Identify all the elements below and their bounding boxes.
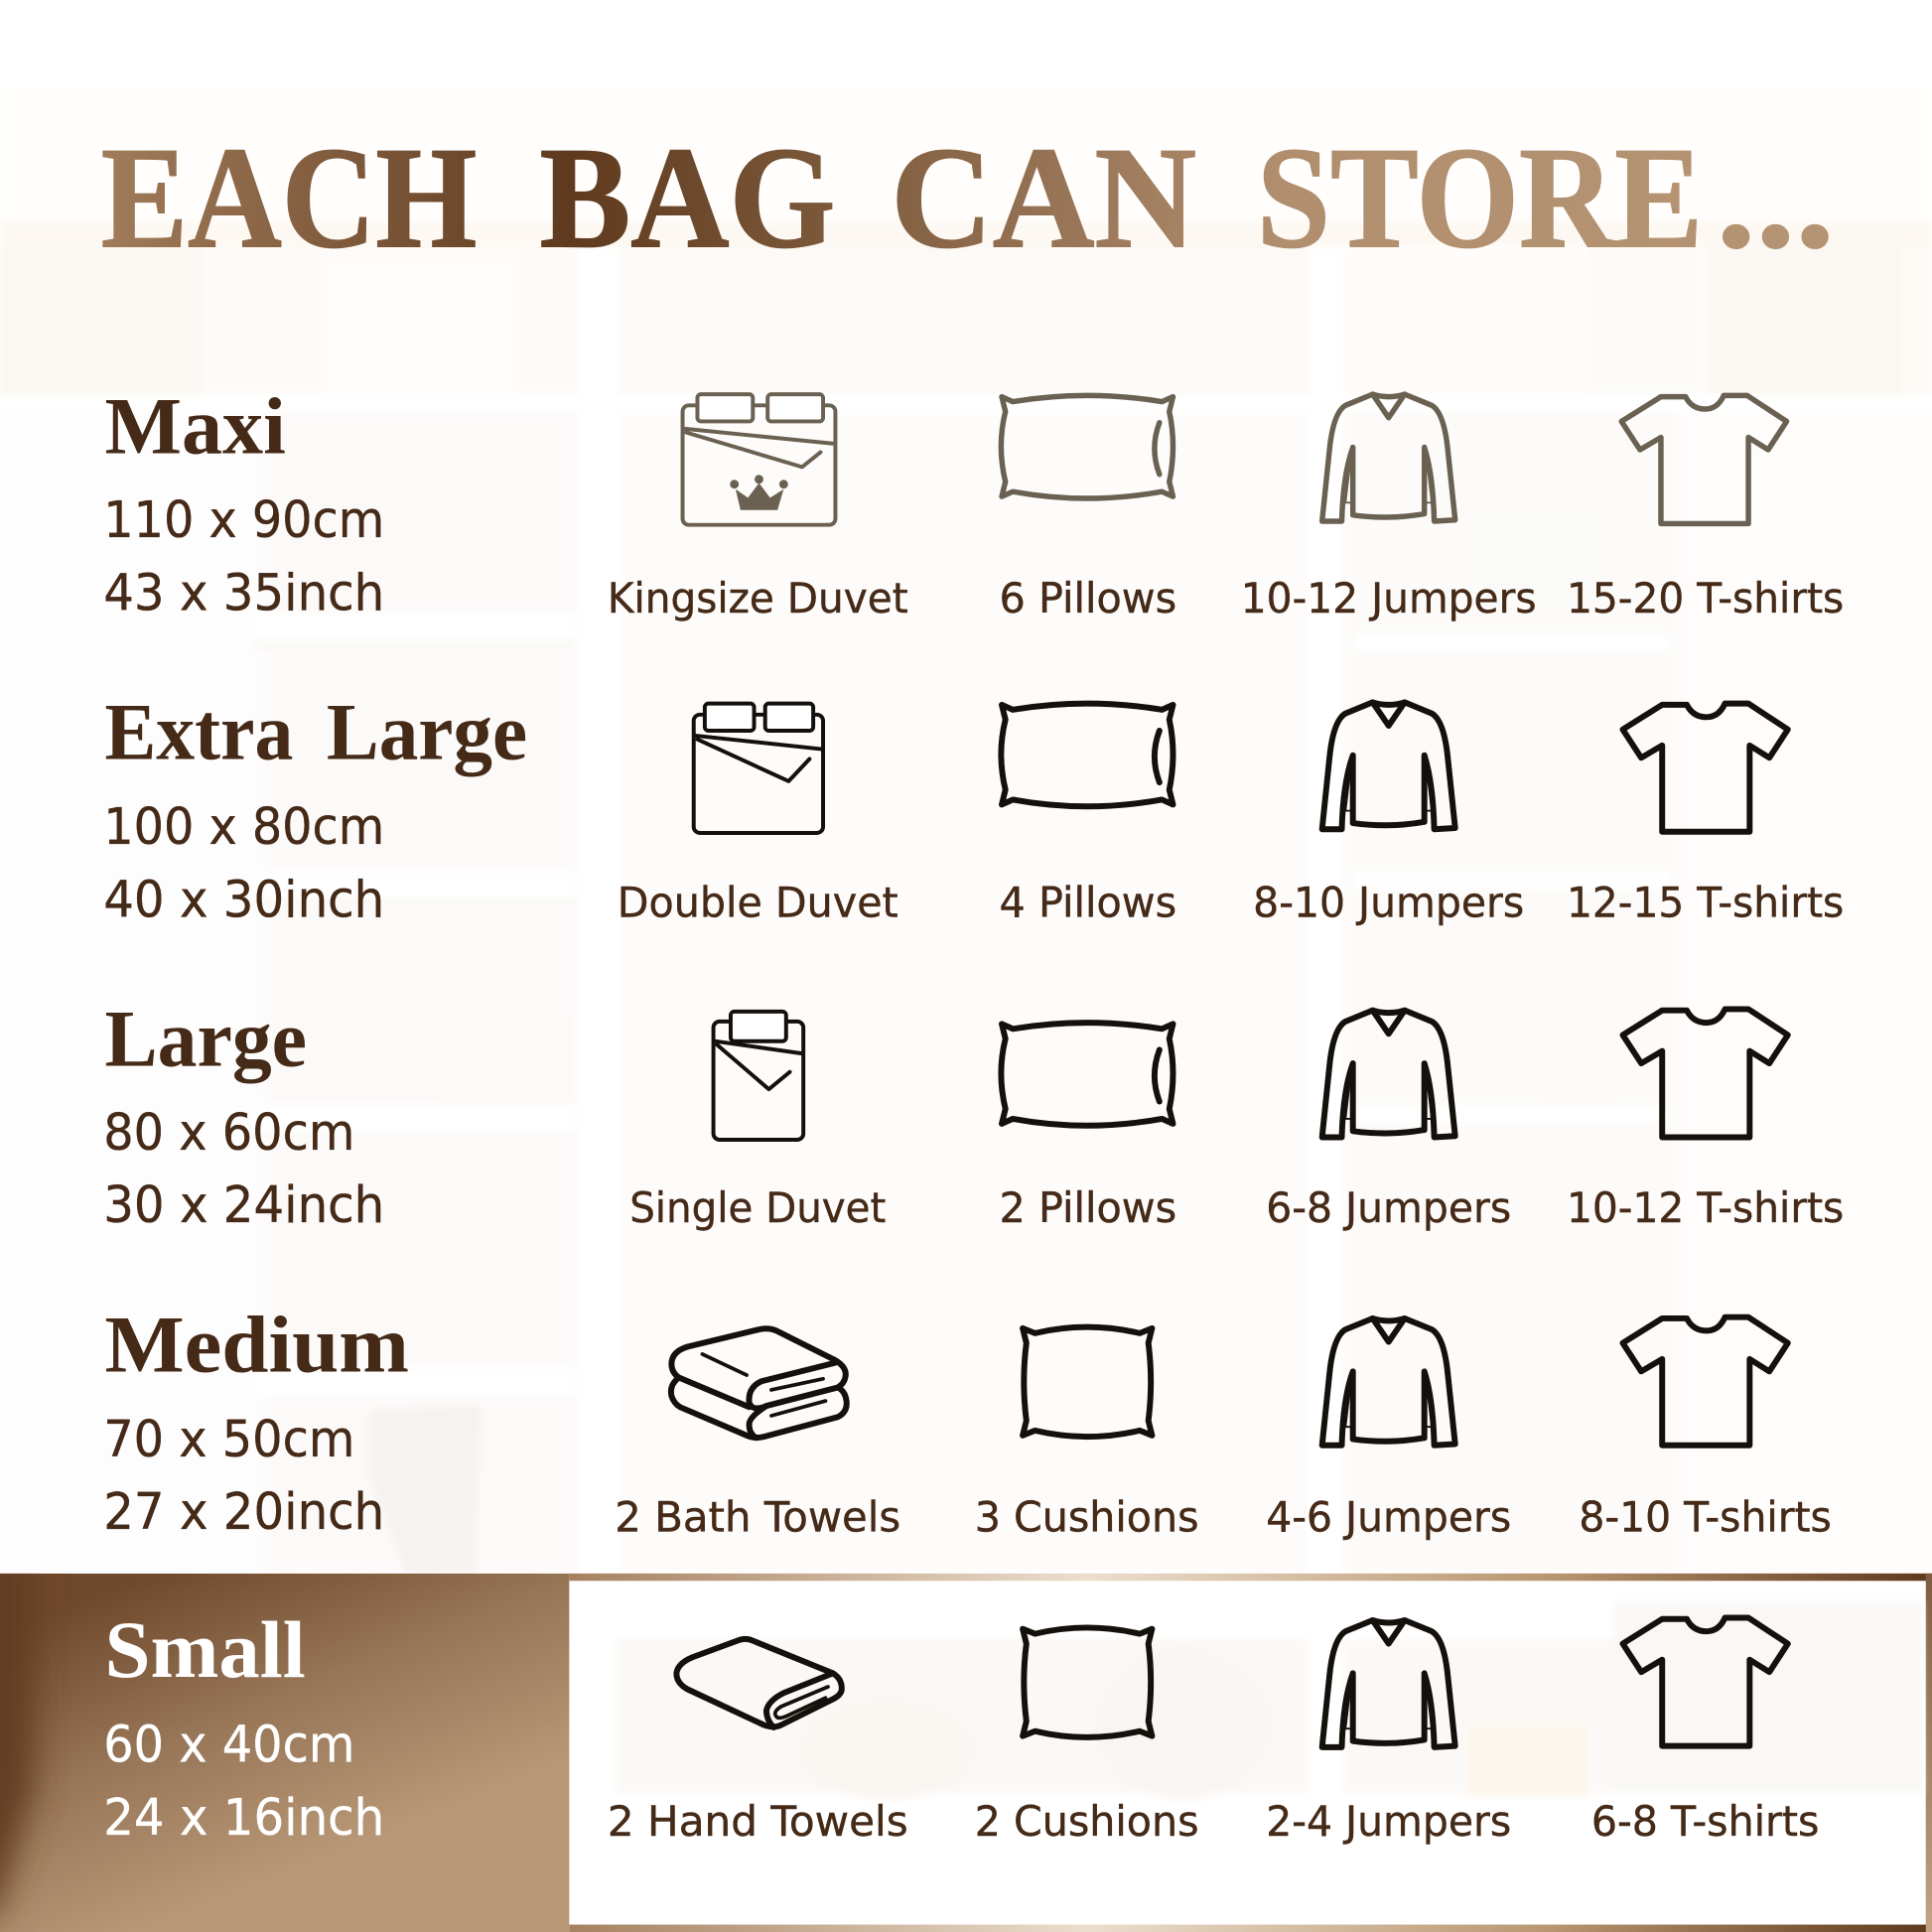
size heading block: Extra Large: Extra <box>104 687 293 777</box>
panel interior with faded shoe photo <box>569 1581 1926 1925</box>
size heading block: Large <box>103 994 384 1234</box>
labels: small capacity <box>608 1797 1819 1846</box>
icon: t-shirt (small) <box>1622 1618 1788 1746</box>
title: CAN <box>891 117 1196 278</box>
icon: t-shirt (maxi) <box>1621 395 1787 523</box>
highlight panel: small size row <box>0 1540 1932 1932</box>
title: ... <box>1717 117 1835 278</box>
labels: large capacity: 2 Pillows <box>1000 1183 1176 1232</box>
size heading block: Maxi <box>103 381 384 621</box>
icon: stacked bath towels <box>671 1328 847 1438</box>
labels: medium capacity: 4-6 Jumpers <box>1266 1493 1511 1542</box>
size heading block: Small: 60 x 40cm <box>103 1716 354 1774</box>
labels: large capacity: Single Duvet <box>629 1183 886 1232</box>
labels: large capacity: 10-12 T-shirts <box>1567 1183 1844 1232</box>
labels: extra large capacity: Double Duvet <box>618 878 898 926</box>
icon: single duvet bed <box>714 1012 803 1140</box>
icon: t-shirt (medium) <box>1622 1317 1788 1446</box>
labels: small capacity: 2 Cushions <box>975 1797 1199 1846</box>
size heading block: Maxi: Maxi <box>104 381 286 472</box>
icon: t-shirt (extra large) <box>1622 704 1788 832</box>
title: EACH <box>101 117 477 278</box>
icon: cushion (small) <box>1023 1627 1152 1737</box>
labels: extra large capacity: 4 Pillows <box>1000 878 1176 926</box>
size heading block: Small: 24 x 16inch <box>103 1788 384 1847</box>
size heading block: Small <box>103 1604 384 1847</box>
labels: maxi capacity: 6 Pillows <box>1000 574 1176 622</box>
icon: rolled hand towel <box>676 1639 842 1727</box>
icon: jumper (extra large) <box>1322 702 1455 829</box>
title <box>101 117 1835 278</box>
labels: extra large capacity <box>618 878 1844 926</box>
title: STORE <box>1257 117 1703 278</box>
size heading block: Large: 80 x 60cm <box>103 1103 354 1162</box>
size heading block: Small: Small <box>104 1604 306 1695</box>
labels: small capacity: 6-8 T-shirts <box>1591 1797 1819 1846</box>
icon: pillow (large) <box>1001 1023 1173 1126</box>
labels: medium capacity: 3 Cushions <box>975 1493 1199 1542</box>
icon: pillow (extra large) <box>1001 704 1173 806</box>
size heading block: Extra Large: 100 x 80cm <box>103 797 384 856</box>
labels: small capacity: 2-4 Jumpers <box>1266 1797 1511 1846</box>
labels: maxi capacity: Kingsize Duvet <box>608 574 908 622</box>
size heading block: Maxi: 110 x 90cm <box>103 490 384 549</box>
icon: cushion (medium) <box>1023 1327 1152 1437</box>
icon: jumper (small) <box>1322 1620 1455 1747</box>
labels: medium capacity: 2 Bath Towels <box>615 1493 900 1542</box>
size heading block: Extra Large <box>103 687 527 928</box>
labels: small capacity: 2 Hand Towels <box>608 1797 908 1846</box>
labels: maxi capacity <box>608 574 1844 622</box>
icon: t-shirt (large) <box>1622 1009 1788 1138</box>
size heading block: Medium <box>103 1299 409 1541</box>
labels: medium capacity <box>615 1493 1832 1542</box>
size heading block: Medium: Medium <box>104 1299 409 1389</box>
icon: double duvet bed <box>694 704 823 833</box>
size heading block: Large: 30 x 24inch <box>103 1175 384 1234</box>
labels: extra large capacity: 12-15 T-shirts <box>1567 878 1844 926</box>
size heading block: Medium: 27 x 20inch <box>103 1482 384 1541</box>
title: BAG <box>540 117 835 278</box>
icon: jumper (large) <box>1322 1011 1455 1138</box>
labels: maxi capacity: 10-12 Jumpers <box>1241 574 1537 622</box>
icon: jumper (maxi) <box>1322 394 1455 521</box>
icon: kingsize duvet bed with crown <box>683 394 835 525</box>
labels: large capacity <box>629 1183 1844 1232</box>
labels: medium capacity: 8-10 T-shirts <box>1579 1493 1832 1542</box>
gradient frame <box>569 1574 1932 1932</box>
size heading block: Maxi: 43 x 35inch <box>103 563 384 621</box>
labels: large capacity: 6-8 Jumpers <box>1266 1183 1511 1232</box>
size heading block: Medium: 70 x 50cm <box>103 1410 354 1468</box>
size heading block: Extra Large: Large <box>327 687 527 777</box>
icon: jumper (medium) <box>1322 1318 1455 1446</box>
size heading block: Large: Large <box>104 994 307 1084</box>
labels: maxi capacity: 15-20 T-shirts <box>1567 574 1844 622</box>
size heading block: Extra Large: 40 x 30inch <box>103 870 384 928</box>
icon: pillow (maxi) <box>1001 395 1173 498</box>
labels: extra large capacity: 8-10 Jumpers <box>1253 878 1524 926</box>
brown label block <box>0 1540 569 1932</box>
